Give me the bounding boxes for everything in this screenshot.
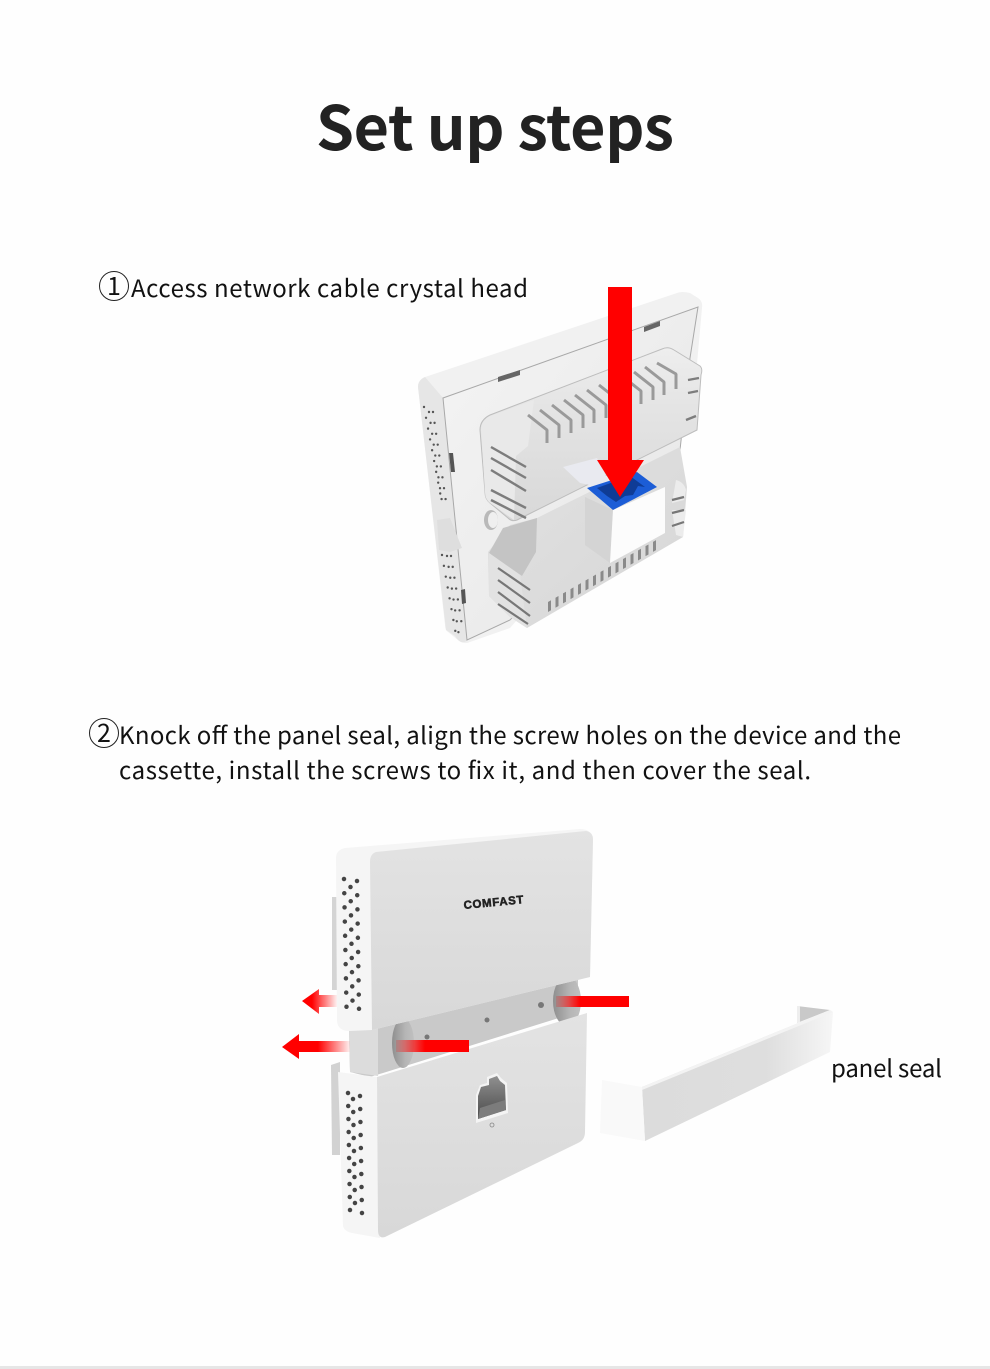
arrow: lower right: [396, 1040, 469, 1052]
title: Set up steps: [316, 79, 674, 168]
step 2 instruction: Knock off the panel seal, align the screw holes on the device and the: [119, 716, 901, 751]
step 1 instruction: Access network cable crystal head: [131, 269, 528, 304]
step 1 instruction: 1: [107, 267, 121, 303]
upper vents: [528, 363, 676, 443]
side speaker holes: [424, 407, 463, 636]
logo: COMFAST: [463, 894, 524, 912]
lower cover: [338, 1013, 587, 1238]
arrow: lower left: [282, 1034, 350, 1059]
panel seal illustration: [600, 1006, 833, 1141]
screw hole: [484, 510, 498, 530]
upper cover: [336, 829, 593, 1031]
panel seal label: panel seal: [831, 1049, 942, 1084]
ethernet port: [585, 472, 665, 563]
device back view illustration: [418, 287, 702, 643]
upper housing: [480, 348, 702, 521]
arrow: upper right: [556, 996, 629, 1007]
step 2 instruction: 2: [97, 714, 111, 750]
device front view illustration: [282, 829, 629, 1238]
arrow: upper left: [302, 989, 337, 1014]
mounting bracket: [349, 975, 581, 1077]
back plate: [418, 292, 702, 643]
upper wall clips: [332, 897, 337, 990]
sticker: [563, 458, 613, 490]
red down arrow: [597, 287, 644, 497]
network port: [476, 1073, 508, 1127]
bottom edge band: [0, 1366, 990, 1369]
lower wall clips: [331, 1062, 340, 1155]
lower vents: [548, 543, 660, 607]
step 2 instruction: cassette, install the screws to fix it, and then cover the seal.: [119, 751, 811, 786]
step 2 instruction: [90, 714, 901, 786]
clips: [498, 321, 660, 382]
lower housing: [488, 447, 687, 628]
